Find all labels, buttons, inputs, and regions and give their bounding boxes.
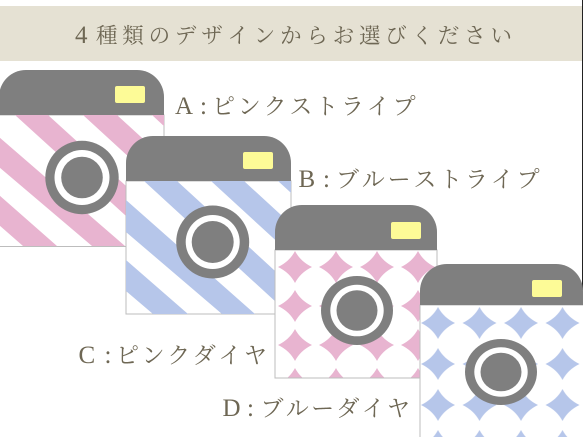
label D: D: ブルーダイヤ xyxy=(222,395,410,422)
camera B: blue stripe xyxy=(126,136,292,314)
camera C: pink diamond xyxy=(275,205,437,378)
camera C lens xyxy=(321,276,393,345)
camera D lens xyxy=(465,339,537,405)
pink stripes xyxy=(0,115,164,246)
label A: A:ピンクストライプ xyxy=(175,93,416,120)
blue stripes xyxy=(126,181,291,314)
camera D flash xyxy=(532,280,562,297)
camera A flash xyxy=(115,86,145,103)
banner title: 4 種類のデザインからお選びください xyxy=(75,22,512,49)
camera C flash xyxy=(391,222,421,239)
camera B flash xyxy=(243,152,273,169)
camera B lens xyxy=(176,206,249,278)
camera A lens xyxy=(45,141,119,214)
label C: C:ピンクダイヤ xyxy=(78,342,267,369)
camera B top xyxy=(126,136,291,181)
label B: B: ブルーストライプ xyxy=(298,166,540,193)
camera D top xyxy=(420,264,583,305)
camera C top xyxy=(275,205,437,250)
banner xyxy=(0,6,582,61)
camera A: pink stripe xyxy=(0,70,164,247)
pink diamonds xyxy=(276,251,436,378)
camera A top xyxy=(0,70,164,115)
blue diamonds xyxy=(421,306,583,437)
camera D: blue diamond xyxy=(420,264,583,437)
